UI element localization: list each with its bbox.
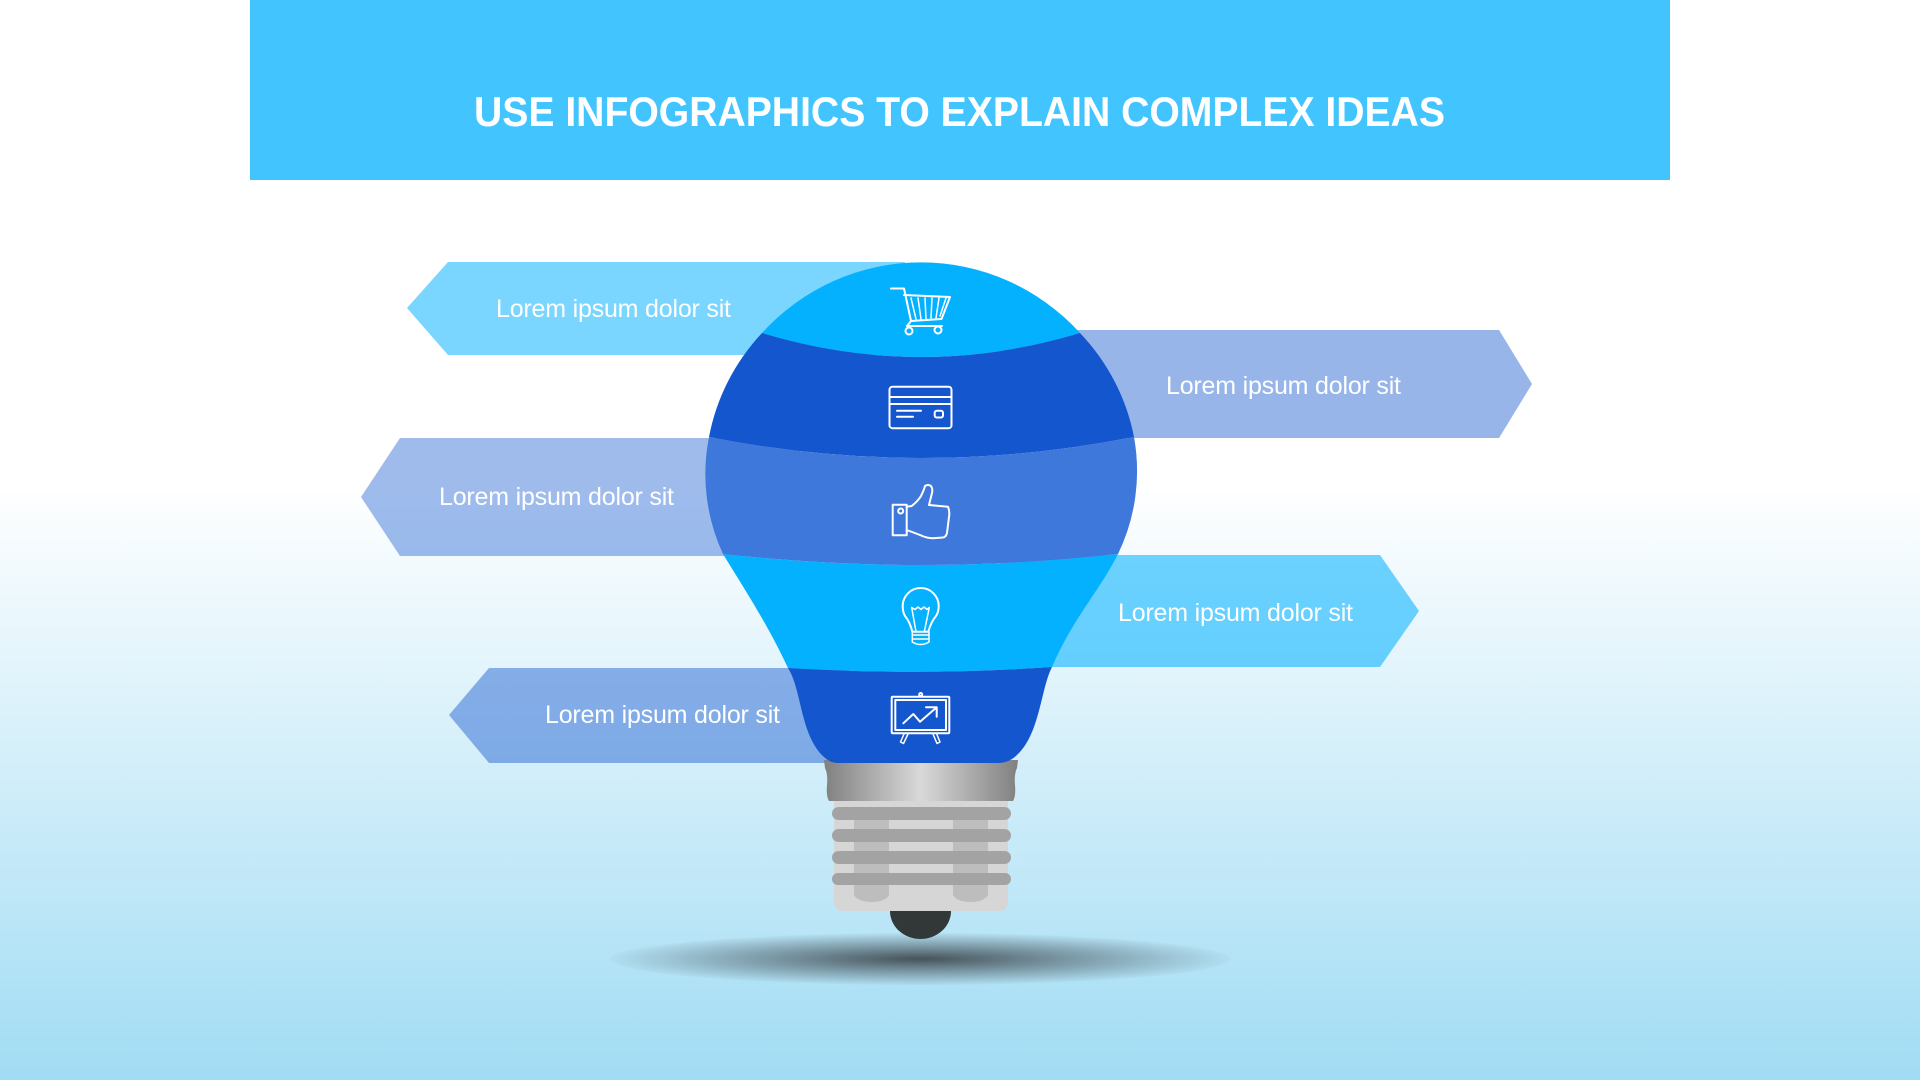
ground shadow [610, 933, 1230, 985]
arrow label 3 [361, 438, 800, 556]
band 4 [723, 554, 1118, 672]
icon: credit card [890, 387, 952, 428]
icon: shopping cart [891, 288, 950, 334]
icon: light bulb [903, 588, 939, 644]
arrow label 1 [407, 262, 905, 355]
arrow label 5 [449, 668, 850, 763]
arrow label 5: Lorem ipsum dolor sit [545, 701, 780, 729]
title: USE INFOGRAPHICS TO EXPLAIN COMPLEX IDEAS [474, 88, 1445, 135]
arrow label 2 [1000, 330, 1532, 438]
band 5 [788, 667, 1052, 763]
bulb screw base [824, 760, 1018, 939]
band 1 [762, 262, 1080, 357]
icon: presentation board [892, 693, 949, 744]
icon: thumbs up [893, 485, 949, 538]
arrow label 4 [1000, 555, 1419, 667]
arrow label 1: Lorem ipsum dolor sit [496, 295, 731, 323]
bulb glass bands [705, 262, 1137, 763]
arrow label 4: Lorem ipsum dolor sit [1118, 599, 1353, 627]
header banner [250, 0, 1670, 180]
arrow label 2: Lorem ipsum dolor sit [1166, 372, 1401, 400]
arrow label 3: Lorem ipsum dolor sit [439, 483, 674, 511]
band 3 [705, 437, 1137, 565]
band 2 [709, 333, 1134, 458]
